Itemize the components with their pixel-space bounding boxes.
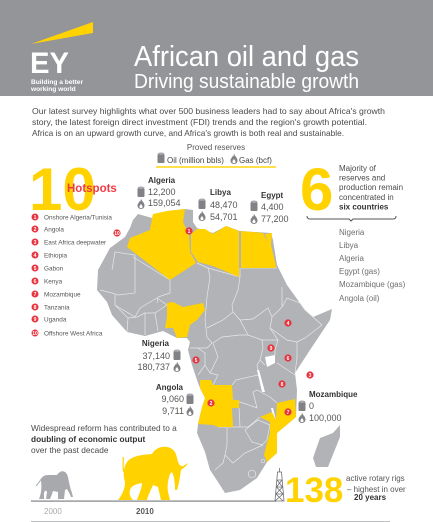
country list: Angola (oil) [339, 294, 380, 303]
Mozambique reserves [298, 390, 358, 423]
map of Africa [97, 209, 340, 493]
EY logo: EY [30, 47, 69, 80]
header band [0, 0, 433, 96]
hotspot list: 5 [34, 266, 37, 272]
EY logo: working world [30, 86, 76, 93]
Mozambique reserves: 0 [309, 401, 314, 411]
intro text: story, the latest foreign direct investment (FDI) trends and the region's growth potential. [32, 117, 367, 127]
hotspot list: Kenya [44, 278, 63, 286]
Libya reserves: Libya [210, 188, 231, 197]
Mozambique reserves: 100,000 [309, 413, 342, 423]
138 rigs stat [285, 471, 406, 510]
six countries callout: 6 [300, 156, 333, 223]
map hotspot markers [113, 227, 314, 416]
Egypt reserves: 77,200 [261, 214, 289, 224]
title: African oil and gas [134, 41, 359, 73]
country list: Egypt (gas) [339, 267, 380, 276]
hotspot list: Onshore Algeria/Tunisia [44, 214, 112, 222]
Angola reserves: 9,060 [161, 394, 184, 404]
Mozambique reserves: Mozambique [309, 390, 358, 399]
brace [307, 216, 396, 221]
icon: large yellow elephant [118, 447, 188, 500]
Egypt highlighted [241, 231, 276, 268]
intro text: Our latest survey highlights what over 500 business leaders had to say about Africa's growth [32, 106, 385, 116]
Libya reserves: 48,470 [210, 200, 238, 210]
intro text: Africa is on an upward growth curve, and Africa's growth is both real and sustainable. [32, 128, 344, 138]
economic output text: doubling of economic output [31, 434, 146, 444]
hotspot list: 1 [34, 215, 37, 221]
six countries callout: production remain [339, 183, 403, 192]
map hotspot markers: 8 [281, 382, 284, 388]
country list [339, 228, 406, 303]
six countries callout: concentrated in [339, 193, 394, 202]
map hotspot markers: 4 [287, 321, 290, 327]
proved reserves legend [156, 143, 276, 168]
10 hotspots heading: Hotspots [67, 183, 117, 195]
map hotspot markers: 9 [270, 346, 273, 352]
10 hotspots heading: 10 [29, 156, 96, 223]
Algeria highlighted [127, 209, 196, 280]
country list: Libya [339, 241, 359, 250]
Nigeria highlighted [165, 302, 205, 338]
Egypt reserves [250, 191, 289, 224]
map hotspot markers: 3 [309, 373, 312, 379]
hotspot list: 4 [34, 253, 37, 259]
hotspot list: Angola [44, 226, 64, 234]
six countries callout: Majority of [339, 164, 377, 173]
Angola reserves [156, 383, 194, 416]
138 rigs stat: active rotary rigs [346, 474, 405, 483]
six countries callout: six countries [339, 202, 389, 212]
Egypt reserves: Egypt [261, 191, 284, 200]
hotspot list: Tanzania [44, 304, 70, 312]
138 rigs stat: – highest in over [347, 485, 406, 494]
proved reserves legend: Gas (bcf) [239, 156, 272, 165]
lakes [257, 355, 276, 420]
hotspot list: 7 [34, 292, 37, 298]
proved reserves legend: Proved reserves [187, 143, 245, 152]
EY logo [30, 22, 93, 93]
economic output text: over the past decade [31, 445, 109, 455]
Libya reserves: 54,701 [210, 212, 238, 222]
Mozambique highlighted [260, 399, 296, 462]
hotspot list: Gabon [44, 266, 64, 272]
Nigeria reserves [137, 339, 180, 372]
map hotspot markers: 5 [195, 358, 198, 364]
economic output text [31, 423, 177, 455]
138 rigs stat: 20 years [354, 493, 387, 502]
six countries callout [300, 156, 406, 303]
Algeria reserves: 159,054 [148, 198, 181, 208]
map hotspot markers: 7 [287, 410, 290, 416]
hotspot list: Uganda [44, 316, 67, 324]
hotspot list: 8 [34, 305, 37, 311]
intro text [32, 106, 385, 138]
hotspot list: 2 [34, 227, 37, 233]
map hotspot markers: 10 [114, 231, 120, 237]
Nigeria reserves: 37,140 [142, 351, 170, 361]
country list: Mozambique (gas) [339, 280, 406, 289]
Algeria reserves [138, 176, 181, 209]
Madagascar [313, 425, 340, 467]
timeline baseline [31, 500, 276, 502]
icon: small grey elephant [36, 471, 73, 499]
footer rule [31, 521, 390, 522]
hotspot list: Ethiopia [44, 252, 68, 260]
hotspot list: Offshore West Africa [44, 330, 103, 338]
Algeria reserves: 12,200 [148, 187, 176, 197]
map hotspot markers: 1 [188, 229, 191, 235]
Nigeria reserves: 180,737 [137, 362, 170, 372]
country borders [100, 252, 322, 478]
six countries callout: reserves and [339, 174, 385, 182]
year label 2010: 2010 [136, 507, 154, 516]
hotspot list: 10 [32, 331, 38, 337]
Libya reserves [198, 188, 238, 222]
Nigeria reserves: Nigeria [142, 339, 170, 348]
hotspot list: Mozambique [44, 292, 81, 298]
Angola reserves: Angola [156, 383, 184, 392]
map hotspot markers: 6 [287, 356, 290, 362]
Angola reserves: 9,711 [162, 406, 184, 416]
Algeria reserves: Algeria [148, 176, 176, 185]
country list: Algeria [339, 254, 364, 263]
subtitle: Driving sustainable growth [134, 70, 359, 93]
proved reserves legend: Oil (million bbls) [167, 156, 224, 165]
hotspot list: 3 [34, 240, 37, 246]
Angola highlighted [198, 380, 239, 427]
Libya highlighted [191, 226, 239, 277]
hotspot list: 6 [34, 279, 37, 285]
138 rigs stat: 138 [285, 471, 343, 510]
EY logo: Building a better [31, 79, 83, 86]
hotspot list [32, 214, 112, 338]
icon: oil rig [275, 468, 284, 501]
year label 2000: 2000 [44, 507, 62, 516]
hotspot list: 9 [34, 317, 37, 323]
hotspot list: East Africa deepwater [44, 240, 107, 246]
country list: Nigeria [339, 228, 365, 237]
Egypt reserves: 4,400 [261, 202, 284, 212]
economic output text: Widespread reform has contributed to a [31, 423, 177, 433]
map hotspot markers: 2 [210, 401, 213, 407]
